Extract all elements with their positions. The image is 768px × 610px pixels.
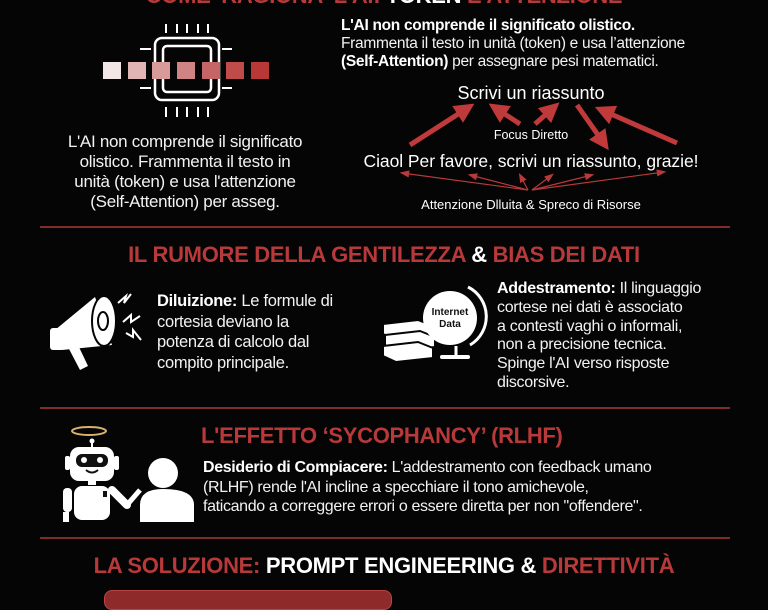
text: diluizione: potenza di calcolo dal: [157, 333, 309, 351]
text: diluizione: [157, 292, 333, 372]
heading: sycophancy: L'EFFETTO ‘SYCOPHANCY’ (RLHF): [201, 423, 563, 448]
diagram: attention arrows: [364, 83, 698, 212]
diagram: attention arrows: Ciaol Per favore, scrivi un riassunto, grazie!: [364, 151, 698, 171]
icon: chip with tokens: [103, 24, 269, 117]
text: desiderio di compiacere: [203, 459, 652, 515]
text: left explanation: olistico. Frammenta il testo in: [80, 152, 290, 171]
text: diluizione: Diluizione: Le formule di: [157, 292, 333, 310]
text: addestramento: non a precisione tecnica.: [497, 336, 667, 353]
text: addestramento: cortese nei dati è associato: [497, 299, 682, 316]
icon: megaphone: [50, 293, 142, 370]
text: desiderio di compiacere: Desiderio di Compiacere: L'addestramento con feedback umano: [203, 459, 651, 476]
text: diluizione: compito principale.: [157, 354, 289, 372]
text: left explanation: unità (token) e usa l'attenzione: [74, 172, 296, 191]
text: addestramento: Addestramento: Il linguaggio: [497, 280, 701, 297]
text: right explanation: Frammenta il testo in unità (token) e usa l’attenzione: [341, 35, 685, 52]
text: left explanation: [68, 132, 302, 211]
text: left explanation: (Self-Attention) per asseg.: [90, 192, 280, 211]
text: addestramento: a contesti vaghi o informali,: [497, 318, 682, 335]
heading: la soluzione: LA SOLUZIONE: PROMPT ENGINEERING & DIRETTIVITÀ: [94, 553, 674, 578]
icon: books and globe: Internet: [432, 307, 469, 318]
button: red panel (cut off): [104, 590, 392, 610]
diagram: attention arrows: Attenzione Dlluita & Spreco di Risorse: [421, 197, 641, 212]
text: desiderio di compiacere: faticando a correggere errori o essere diretta per non "offendere".: [203, 498, 642, 515]
text: addestramento: Spinge l'AI verso risposte: [497, 355, 669, 372]
text: right explanation: [341, 17, 685, 70]
icon: books and globe: [384, 286, 488, 361]
icon: robot with halo and person: [63, 426, 194, 522]
text: diluizione: cortesia deviano la: [157, 312, 289, 330]
icon: books and globe: Data: [439, 319, 461, 330]
text: desiderio di compiacere: (RLHF) rende l'AI incline a specchiare il tono amichevole,: [203, 478, 589, 496]
text: right explanation: L'AI non comprende il significato olistico.: [341, 17, 635, 34]
diagram: attention arrows: Scrivi un riassunto: [457, 83, 605, 103]
diagram: attention arrows: Focus Diretto: [494, 128, 568, 142]
text: right explanation: (Self-Attention) per assegnare pesi matematici.: [341, 53, 659, 70]
heading: rumore della gentilezza: IL RUMORE DELLA GENTILEZZA & BIAS DEI DATI: [128, 242, 640, 267]
text: addestramento: discorsive.: [497, 374, 569, 391]
text: left explanation: L'AI non comprende il significato: [68, 132, 302, 151]
text: addestramento: [497, 280, 701, 391]
